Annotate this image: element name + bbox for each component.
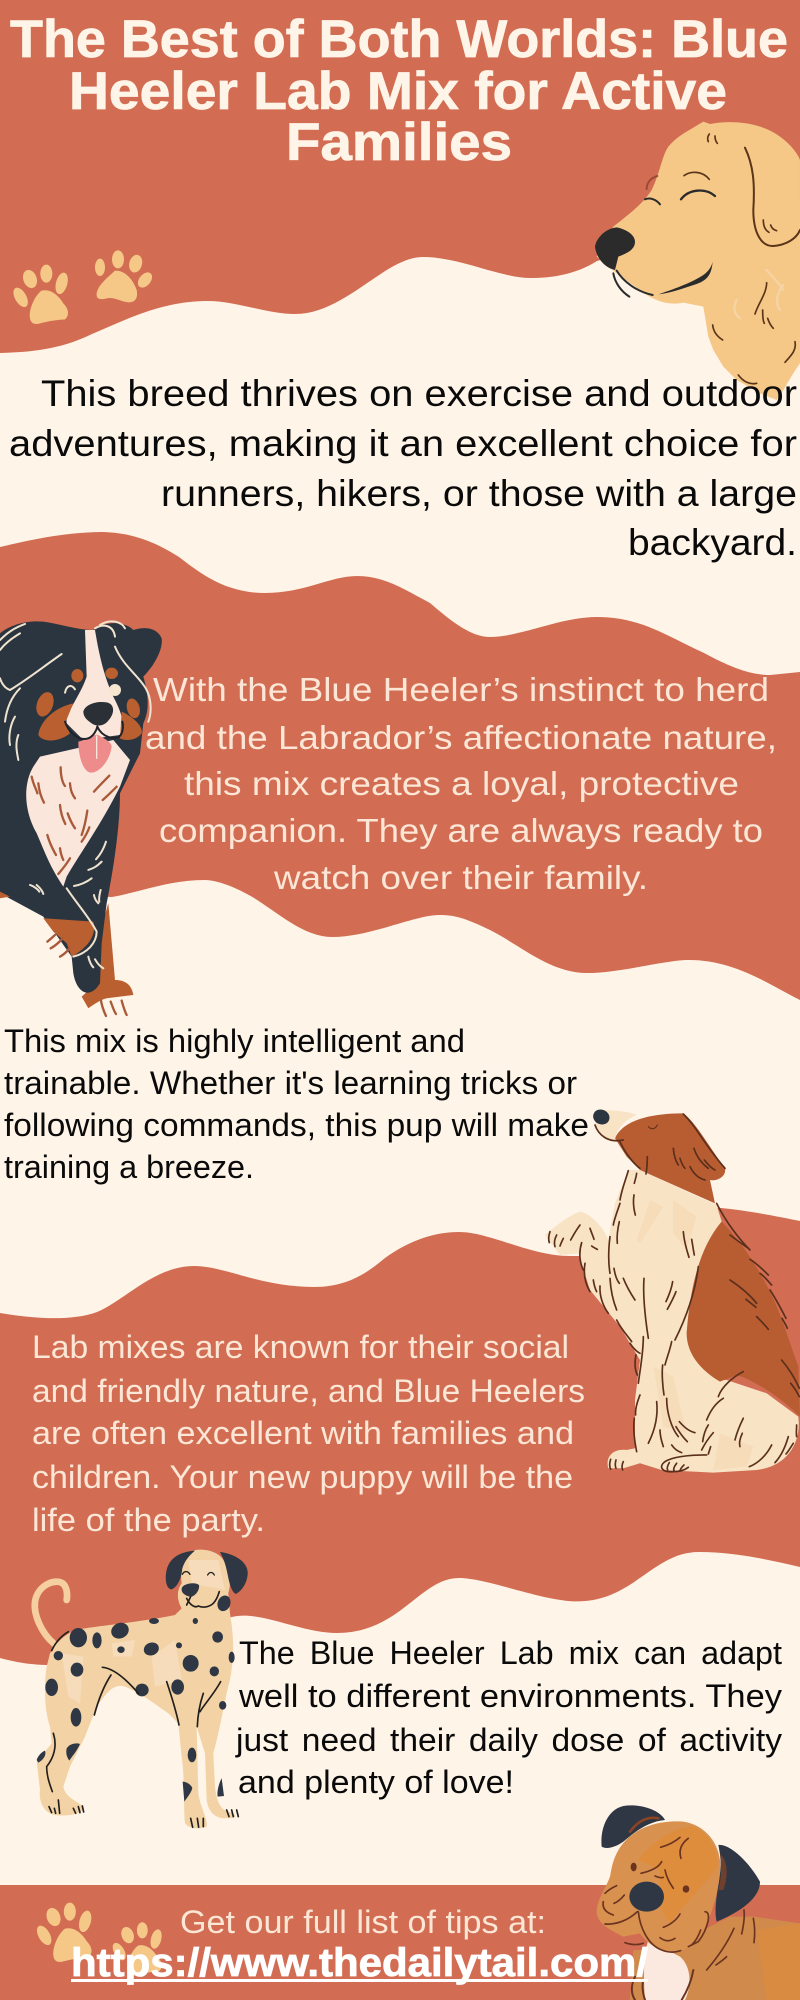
text block: exercise: adventures, making it an excellent choice for xyxy=(9,423,797,464)
title xyxy=(10,10,788,172)
text block: adaptability: The Blue Heeler Lab mix can adapt xyxy=(239,1635,782,1671)
text block: adaptability: well to different environments. They xyxy=(238,1678,782,1714)
text block: adaptability xyxy=(235,1635,782,1800)
text block: loyal companion: companion. They are always ready to xyxy=(159,812,763,849)
icon: footer paw large xyxy=(34,1903,93,1962)
text block: loyal companion: this mix creates a loyal, protective xyxy=(184,765,739,802)
icon: golden dog xyxy=(595,122,800,400)
icon: paw prints footer xyxy=(34,1903,164,1976)
icon: collie dog xyxy=(545,1107,800,1473)
text block: social nature: are often excellent with families and xyxy=(32,1415,574,1451)
text block: social nature: Lab mixes are known for their social xyxy=(32,1329,569,1365)
icon: dalmatian xyxy=(35,1550,248,1828)
footer link: https://www.thedailytail.com/ xyxy=(71,1941,648,1985)
wave band: loyalty section xyxy=(0,532,800,1000)
text block: loyal companion: and the Labrador’s affectionate nature, xyxy=(145,719,777,756)
text block: social nature: life of the party. xyxy=(32,1502,265,1538)
text block: intelligence: training a breeze. xyxy=(4,1149,254,1185)
text block: adaptability: just need their daily dose of activity xyxy=(235,1722,782,1758)
text block: intelligence: This mix is highly intelligent and xyxy=(4,1023,465,1059)
title: The Best of Both Worlds: Blue xyxy=(10,10,788,69)
text block: exercise xyxy=(9,373,797,563)
wave band: social section xyxy=(0,1207,800,1665)
icon: boxer dog xyxy=(597,1805,800,2000)
icon: bernese mountain dog xyxy=(0,621,162,1016)
title: Families xyxy=(286,113,512,172)
text block: social nature xyxy=(32,1329,585,1538)
text block: intelligence xyxy=(4,1023,589,1185)
text block: loyal companion: With the Blue Heeler’s instinct to herd xyxy=(153,671,769,708)
text block: exercise: runners, hikers, or those with a large xyxy=(161,473,797,514)
text block: intelligence: trainable. Whether it's learning tricks or xyxy=(4,1065,577,1101)
title: Heeler Lab Mix for Active xyxy=(69,62,727,121)
text block: intelligence: following commands, this pup will make xyxy=(4,1107,589,1143)
text block: adaptability: and plenty of love! xyxy=(238,1764,514,1800)
icon: paw prints header xyxy=(10,250,155,324)
text block: social nature: children. Your new puppy will be the xyxy=(32,1459,573,1495)
footer call to action: Get our full list of tips at: xyxy=(180,1904,546,1940)
text block: loyal companion: watch over their family. xyxy=(273,859,648,896)
wave band: header xyxy=(0,0,800,353)
icon: footer paw small xyxy=(110,1922,164,1976)
text block: exercise: backyard. xyxy=(628,522,797,563)
text block: social nature: and friendly nature, and Blue Heelers xyxy=(32,1373,585,1409)
footer band xyxy=(0,1885,800,2000)
text block: exercise: This breed thrives on exercise and outdoor xyxy=(41,373,797,414)
text block: loyal companion xyxy=(145,671,777,896)
